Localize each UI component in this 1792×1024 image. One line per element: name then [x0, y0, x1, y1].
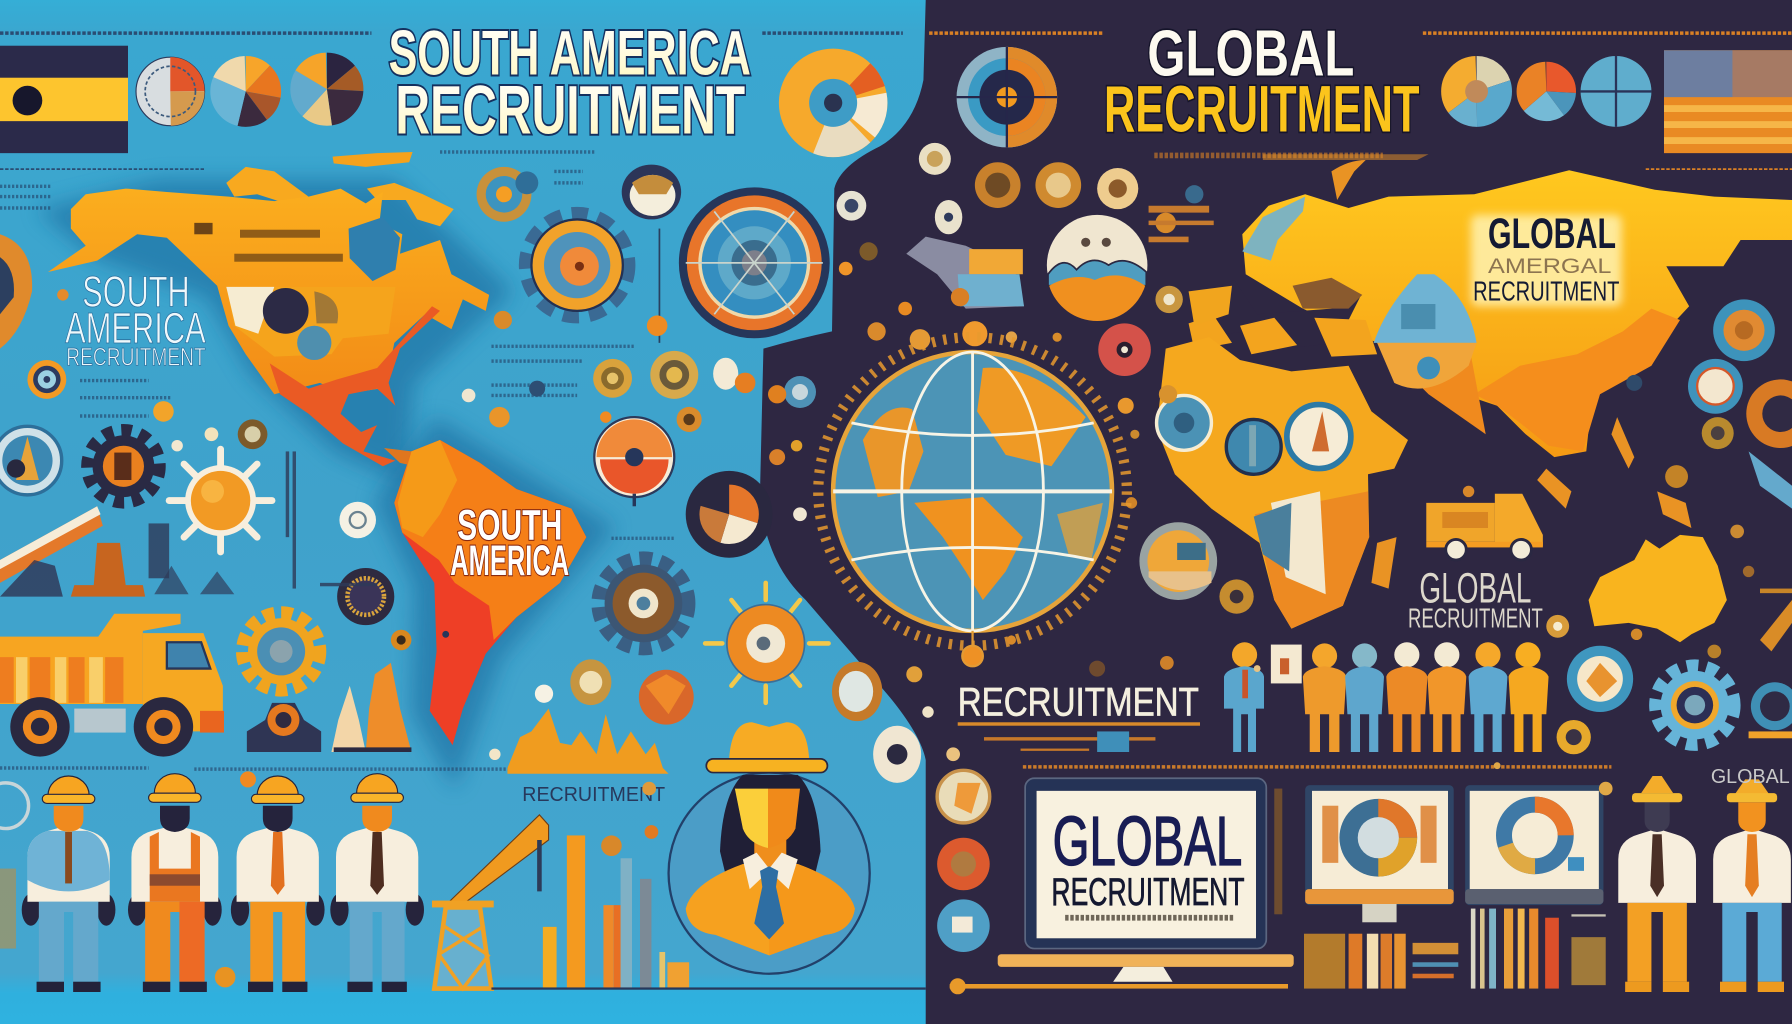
label: south america recruitment left: AMERICA: [65, 305, 206, 353]
text lines: left panel placeholder copy: [0, 152, 674, 769]
icon: small coins near map: [1160, 579, 1591, 754]
truck: dump truck: [0, 614, 224, 757]
chart: skyline spikes: [507, 709, 669, 774]
header rule: south america: [0, 33, 903, 169]
icon: swirl badge one: [477, 167, 538, 222]
person: worker blue shirt: [22, 776, 115, 992]
pie chart: global three: [1581, 56, 1651, 127]
map: south america: [394, 440, 586, 745]
icon: gold gear: [242, 613, 320, 690]
title: global recruitment: RECRUITMENT: [1104, 72, 1419, 146]
decorative dots: south america: [0, 289, 921, 987]
icon: blue ring badge: [1567, 646, 1633, 712]
pie chart: segments two: [309, 71, 345, 107]
label: south america recruitment left: SOUTH: [82, 268, 190, 316]
chart: bar chart south america: [543, 835, 689, 989]
icon: mine equipment silhouettes: [149, 451, 377, 589]
title: south america recruitment: RECRUITMENT: [395, 72, 745, 149]
person: global worker right: [1713, 779, 1791, 992]
underline strip below recruitment: [958, 722, 1200, 752]
pie chart: striped: [136, 57, 205, 126]
icon: presentation board: [1271, 645, 1302, 683]
person: global worker left: [1618, 776, 1696, 992]
panel: global background: [760, 0, 1792, 1024]
donut chart: top right of south america panel: [794, 64, 872, 142]
icon: blue grey gear: [599, 559, 688, 648]
label: global american recruitment on map: [1471, 210, 1622, 307]
label: south america on map: AMERICA: [450, 537, 569, 584]
person: blue suit with board: [1224, 642, 1264, 752]
decorative dots: global scatter: [906, 185, 1792, 914]
person: blue two: [1469, 642, 1507, 752]
icon: red badge: [1098, 323, 1151, 376]
icon: small bulbs: [535, 659, 694, 725]
monitor: global recruitment: [950, 778, 1294, 994]
icon: small badges row: [238, 315, 755, 449]
flag: global: [1664, 50, 1792, 153]
monitor base: [998, 954, 1294, 982]
person: gold: [1509, 642, 1549, 752]
icon: blue dome on map: [1374, 274, 1477, 389]
map inset: picture over united states: [226, 287, 395, 360]
icon: desk badge: [1139, 522, 1217, 600]
icon: compass wheel: [679, 187, 830, 338]
people row: global team: [1224, 642, 1549, 752]
map: south america halo: [394, 440, 589, 749]
icon: target badge: [27, 360, 66, 399]
globe: world sphere: [833, 352, 1112, 631]
map text: canada labels: [194, 223, 343, 262]
icon: africa badge three: [1287, 405, 1351, 469]
decorative dots: around globe: [768, 191, 1183, 509]
icon: left edge figure: [0, 234, 32, 349]
icon: sun gear: [169, 449, 272, 552]
person: blue one: [1345, 643, 1384, 752]
icon: white ring: [339, 502, 376, 538]
label: recruitment small: RECRUITMENT: [522, 783, 666, 806]
globe: pins: [962, 631, 983, 666]
header rule: global: [929, 33, 1792, 169]
icon: africa badge one: [1157, 395, 1211, 450]
globe: tick ring: [818, 337, 1127, 646]
chart: bar strip two: [1471, 909, 1559, 989]
label: global american recruitment on map: GLOBAL: [1488, 210, 1616, 257]
label: south america on map: [450, 501, 569, 584]
person: worker blue trousers: [330, 774, 424, 992]
map: eurasia and africa: [1157, 154, 1792, 629]
icon: furnace: [247, 703, 321, 752]
map: australia: [1589, 535, 1727, 642]
monitor: global recruitment: RECRUITMENT: [1051, 871, 1245, 914]
flag: south america: [0, 46, 128, 153]
icon: sun badge: [705, 583, 829, 703]
monitor: globe donut: [1305, 785, 1454, 922]
map: north america: [48, 152, 489, 469]
slider bar: [950, 978, 1288, 994]
person: worker orange vest: [128, 774, 222, 992]
chart: side legend lines: [1413, 914, 1606, 985]
pie chart: global one: [1459, 74, 1494, 109]
label: global small top right: GLOBAL: [1711, 765, 1790, 788]
label: south america on map: SOUTH: [457, 501, 562, 548]
icon: dark gear: [88, 431, 159, 502]
icon: vehicle collage: [906, 237, 1024, 309]
person: orange one: [1303, 643, 1346, 752]
icon: large gear: [526, 214, 629, 317]
label: global recruitment mid: GLOBAL: [1419, 564, 1531, 611]
title: south america recruitment: [389, 18, 751, 149]
title: global recruitment: [1104, 16, 1419, 146]
map detail: scattered islands: [1263, 154, 1691, 589]
label: south america recruitment left: RECRUITMENT: [66, 344, 206, 372]
map: north america halo: [69, 194, 491, 463]
icon: right badges: [1688, 299, 1792, 509]
baseline: south america bottom: [491, 987, 926, 990]
icon: light blue gear: [1656, 666, 1734, 744]
icon: dark pie badge: [686, 471, 773, 558]
person: worker orange trousers: [231, 776, 325, 992]
pie chart: segments one: [228, 74, 263, 109]
label: global american recruitment on map: RECRUITMENT: [1473, 276, 1620, 307]
panel: south america background: [0, 0, 949, 1024]
icons: coin row: [919, 143, 1138, 234]
pie chart: global two: [1531, 77, 1561, 106]
icon: cream badge: [622, 165, 681, 219]
icon: left ring circle: [0, 426, 62, 495]
chart: bar strip one: [1304, 934, 1406, 989]
person: orange two: [1386, 642, 1427, 752]
title: south america recruitment: SOUTH AMERICA: [389, 18, 751, 88]
icon: landscape circle: [1047, 215, 1147, 321]
label: global american recruitment on map: AMERGAL: [1488, 253, 1611, 278]
icon: left column badges: [937, 747, 990, 952]
icon: ramp: [0, 506, 103, 583]
truck: global: [1426, 494, 1543, 560]
label: global recruitment mid: RECRUITMENT: [1408, 602, 1543, 633]
person: woman with hat in circle: [669, 722, 870, 974]
icon: oil derrick with boom: [432, 815, 549, 989]
divider: global dotted rule: [1023, 765, 1611, 768]
icon: ornate dark badge: [337, 568, 411, 650]
icon: mountains: [0, 543, 234, 597]
icon: africa badge two: [1226, 419, 1281, 474]
person: orange three: [1427, 642, 1466, 752]
icon: pendant gauge: [594, 417, 674, 506]
monitor: global recruitment: GLOBAL: [1053, 802, 1242, 880]
monitor: donut chart: [1465, 785, 1603, 905]
donut chart: global top left: [957, 47, 1057, 147]
title: global recruitment: GLOBAL: [1147, 16, 1354, 89]
icon: smokestacks: [331, 663, 411, 752]
label: south america recruitment left: [65, 268, 206, 372]
label: recruitment white: RECRUITMENT: [958, 680, 1199, 724]
icon: pendant line: [658, 229, 660, 343]
icon: right edge badge: [1749, 682, 1792, 738]
label: global recruitment mid: [1408, 564, 1543, 633]
